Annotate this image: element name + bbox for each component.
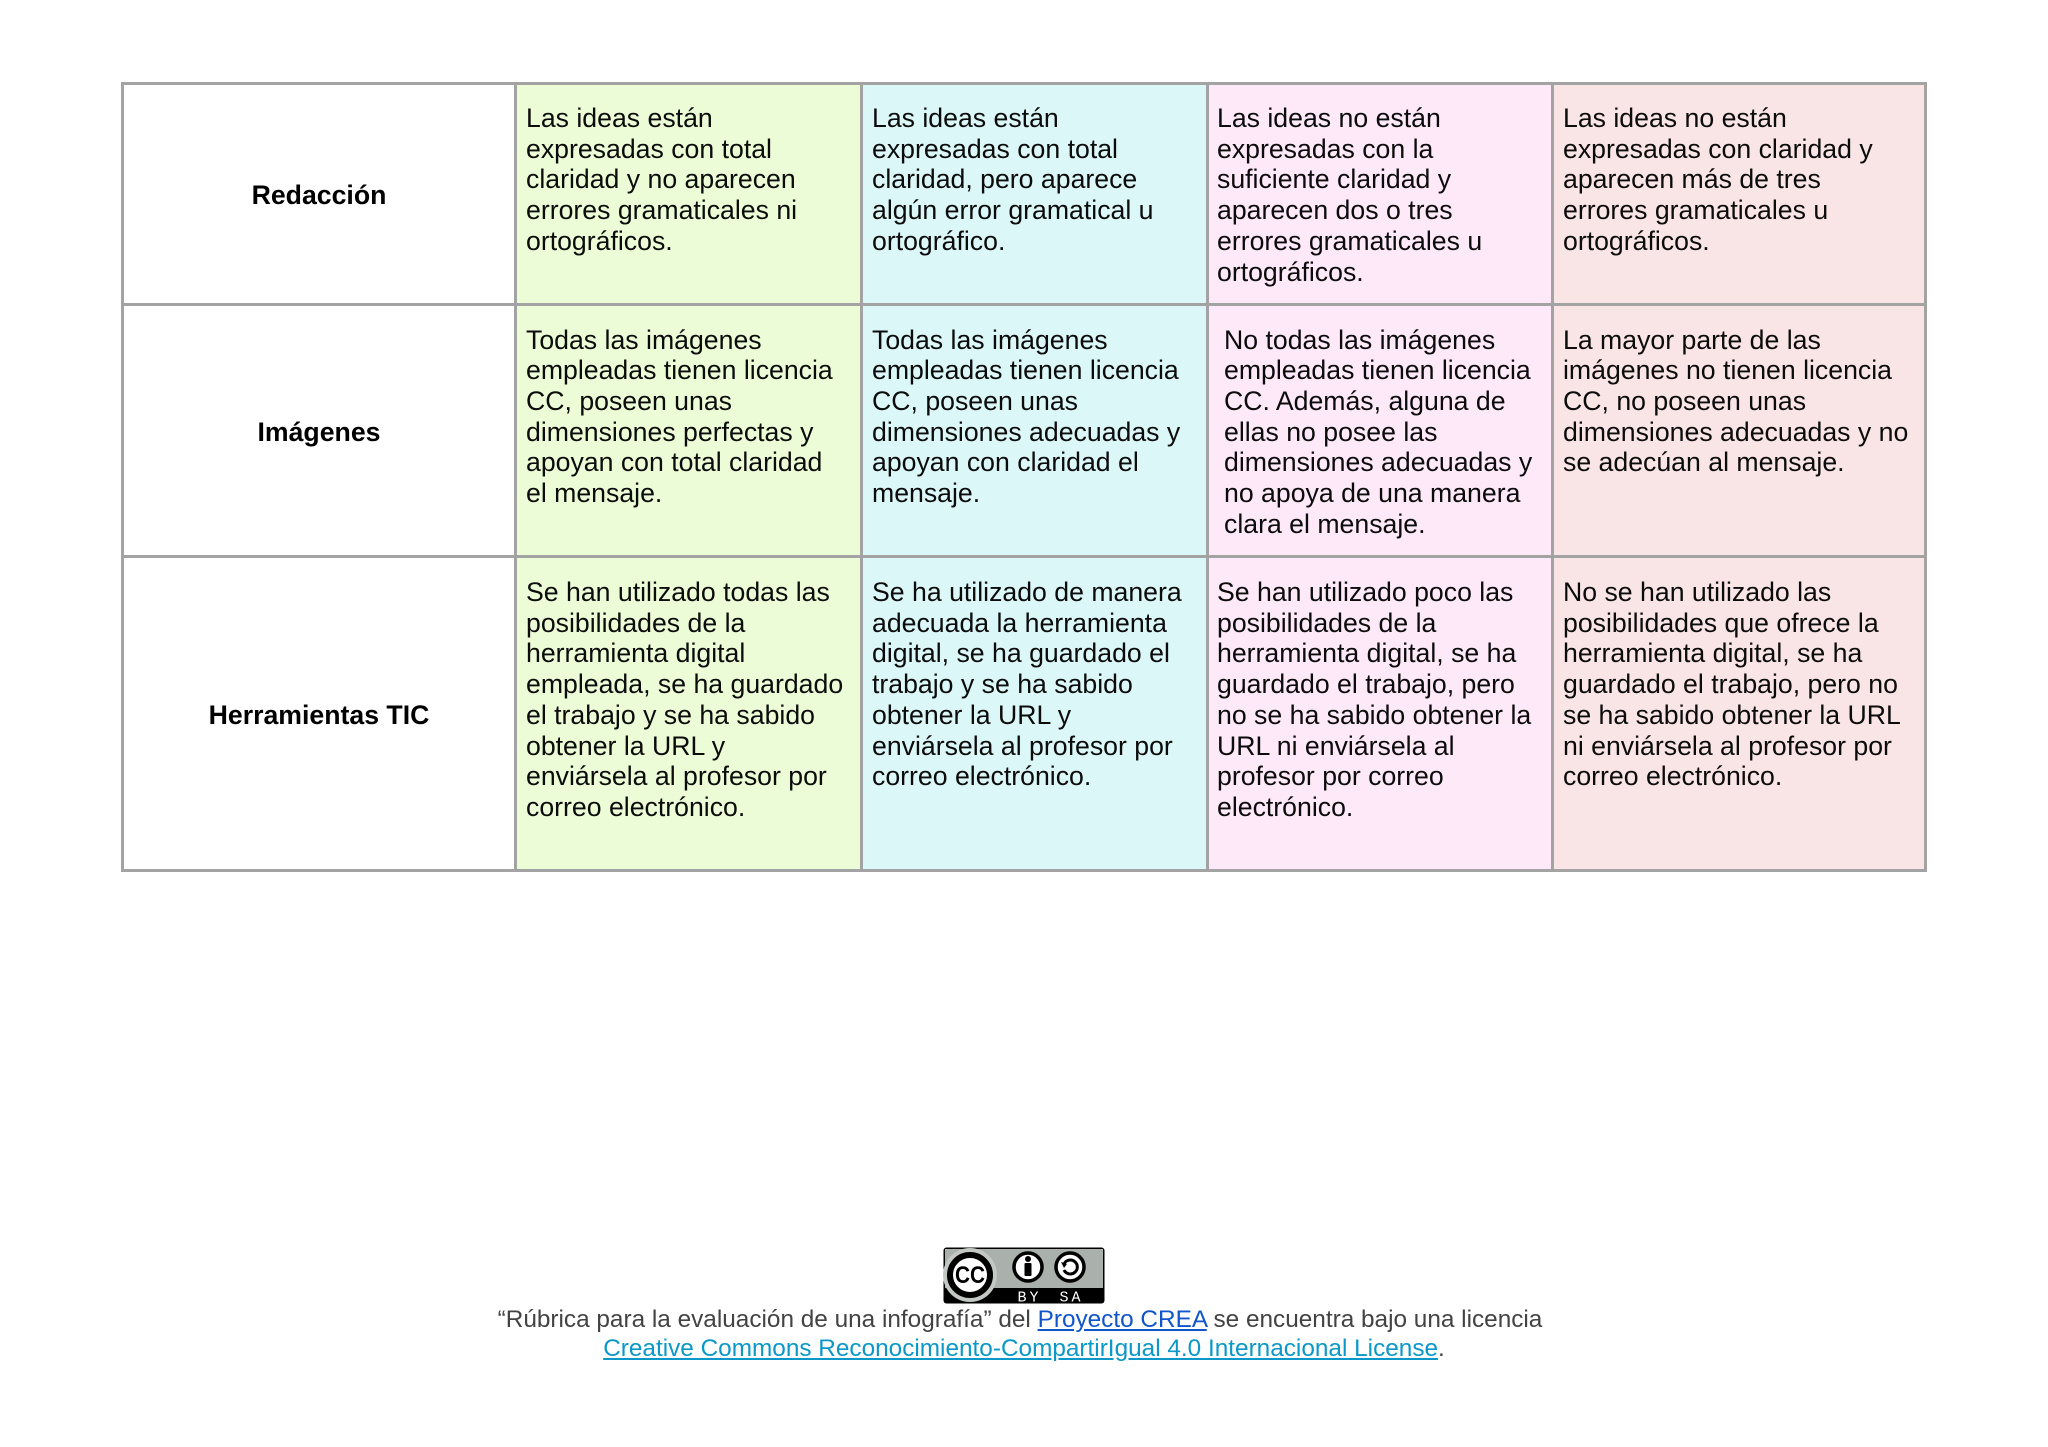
text: Herramientas TIC level 3: herramienta digital, se ha (1217, 638, 1516, 668)
text: Herramientas TIC level 2: obtener la URL y (872, 700, 1071, 730)
text: Redacción level 2 (872, 103, 1154, 256)
text: Imágenes level 1: Todas las imágenes (526, 324, 762, 354)
text: Imágenes level 1: CC, poseen unas (526, 386, 732, 416)
row 3 level 1 cell (514, 555, 863, 872)
text: Imágenes level 2 (872, 324, 1180, 508)
text: Herramientas TIC level 4: posibilidades que ofrece la (1563, 608, 1879, 638)
text: Imágenes level 4: imágenes no tienen licencia (1563, 355, 1892, 385)
text: Herramientas TIC level 2: adecuada la herramienta (872, 608, 1167, 638)
text: Redacción level 1: ortográficos. (526, 226, 673, 256)
text: Herramientas TIC level 1 (526, 577, 843, 822)
text: Herramientas TIC level 4: ni enviársela al profesor por (1563, 731, 1892, 761)
text: Herramientas TIC level 2 (872, 577, 1182, 791)
text: Imágenes level 2: apoyan con claridad el (872, 447, 1139, 477)
text: Imágenes level 3: empleadas tienen licencia (1224, 355, 1531, 385)
row 3 header cell: Herramientas TIC (121, 555, 517, 872)
text: Herramientas TIC level 3: electrónico. (1217, 792, 1353, 822)
text: Imágenes level 1: el mensaje. (526, 478, 662, 508)
text: Herramientas TIC level 3: Se han utilizado poco las (1217, 577, 1513, 607)
text: Herramientas TIC level 3: no se ha sabido obtener la (1217, 700, 1531, 730)
text: Herramientas TIC level 2: Se ha utilizado de manera (872, 577, 1182, 607)
text: Redacción level 2: algún error gramatical u (872, 195, 1154, 225)
footer: license line 2: Creative Commons Reconocimiento-CompartirIgual 4.0 Internacional License. (603, 1334, 1445, 1362)
text: Herramientas TIC level 3: profesor por correo (1217, 761, 1444, 791)
footer: license line 1: “Rúbrica para la evaluación de una infografía” del Proyecto CREA se encuentra bajo una licencia (498, 1306, 1542, 1333)
text: Redacción level 4: ortográficos. (1563, 226, 1710, 256)
text: Imágenes level 2: CC, poseen unas (872, 386, 1078, 416)
row 1 header cell: Redacción (121, 82, 517, 306)
row 2 level 2 cell (860, 303, 1209, 558)
row 1 level 3 cell (1206, 82, 1554, 306)
text: Imágenes level 4: se adecúan al mensaje. (1563, 447, 1845, 477)
row 2 header cell: Imágenes (121, 303, 517, 558)
text: Imágenes level 3: ellas no posee las (1224, 417, 1437, 447)
text: Herramientas TIC level 4: correo electrónico. (1563, 761, 1782, 791)
text: Herramientas TIC level 2: digital, se ha guardado el (872, 638, 1170, 668)
rubric table (121, 82, 1927, 872)
text: Redacción level 3: aparecen dos o tres (1217, 195, 1453, 225)
text: Redacción level 2: ortográfico. (872, 226, 1005, 256)
text: Imágenes level 2: empleadas tienen licencia (872, 355, 1179, 385)
row 2 level 4 cell (1551, 303, 1927, 558)
text: Imágenes level 1: dimensiones perfectas y (526, 417, 813, 447)
text: Redacción level 1: errores gramaticales ni (526, 195, 797, 225)
text: Herramientas TIC level 2: enviársela al profesor por (872, 731, 1173, 761)
text: Herramientas TIC level 1: enviársela al profesor por (526, 761, 827, 791)
heading: Redacción: Redacción (252, 180, 386, 210)
text: Herramientas TIC level 4: se ha sabido obtener la URL (1563, 700, 1901, 730)
text: Imágenes level 3: CC. Además, alguna de (1224, 386, 1506, 416)
text: Herramientas TIC level 4: No se han utilizado las (1563, 577, 1831, 607)
text: Imágenes level 4 (1563, 324, 1908, 477)
text: Redacción level 1 (526, 103, 797, 256)
text: Herramientas TIC level 1: el trabajo y se ha sabido (526, 700, 815, 730)
text: Imágenes level 1: apoyan con total claridad (526, 447, 822, 477)
text: Redacción level 3: errores gramaticales u (1217, 226, 1482, 256)
text: Imágenes level 4: CC, no poseen unas (1563, 386, 1806, 416)
text: Redacción level 4: expresadas con claridad y (1563, 134, 1873, 164)
text: Redacción level 3: expresadas con la (1217, 134, 1433, 164)
text: Redacción level 3: Las ideas no están (1217, 103, 1441, 133)
text: Redacción level 3 (1217, 103, 1482, 287)
text: Imágenes level 1 (526, 324, 833, 508)
text: Imágenes level 2: mensaje. (872, 478, 980, 508)
text: Redacción level 3: suficiente claridad y (1217, 164, 1451, 194)
text: Redacción level 1: expresadas con total (526, 134, 772, 164)
text: Herramientas TIC level 3: posibilidades de la (1217, 608, 1436, 638)
text: Imágenes level 3: clara el mensaje. (1224, 509, 1426, 539)
text: Herramientas TIC level 3 (1217, 577, 1532, 822)
row 2 level 1 cell (514, 303, 863, 558)
row 1 level 4 cell (1551, 82, 1927, 306)
text: Imágenes level 2: Todas las imágenes (872, 324, 1108, 354)
text: Imágenes level 4: dimensiones adecuadas y no (1563, 417, 1908, 447)
icon: Creative Commons BY-SA badge (943, 1248, 1104, 1305)
text: Imágenes level 3 (1224, 324, 1532, 539)
heading: Imágenes: Imágenes (258, 417, 380, 447)
text: Herramientas TIC level 1: posibilidades de la (526, 608, 745, 638)
text: Herramientas TIC level 3: guardado el trabajo, pero (1217, 669, 1515, 699)
text: Imágenes level 2: dimensiones adecuadas y (872, 417, 1180, 447)
text: Herramientas TIC level 4: guardado el trabajo, pero no (1563, 669, 1898, 699)
row 3 level 4 cell (1551, 555, 1927, 872)
text: Imágenes level 3: no apoya de una manera (1224, 478, 1520, 508)
text: Redacción level 3: ortográficos. (1217, 257, 1364, 287)
text: Herramientas TIC level 1: empleada, se ha guardado (526, 669, 843, 699)
text: Redacción level 4 (1563, 103, 1873, 256)
text: Herramientas TIC level 1: obtener la URL y (526, 731, 725, 761)
row 1 level 1 cell (514, 82, 863, 306)
text: Herramientas TIC level 1: Se han utilizado todas las (526, 577, 830, 607)
text: Herramientas TIC level 4 (1563, 577, 1901, 791)
text: Imágenes level 3: dimensiones adecuadas y (1224, 447, 1532, 477)
text: Redacción level 2: claridad, pero aparece (872, 164, 1137, 194)
text: Imágenes level 3: No todas las imágenes (1224, 324, 1495, 354)
text: Redacción level 1: Las ideas están (526, 103, 713, 133)
text: Redacción level 4: errores gramaticales u (1563, 195, 1828, 225)
text: Herramientas TIC level 3: URL ni enviársela al (1217, 731, 1455, 761)
text: Imágenes level 4: La mayor parte de las (1563, 324, 1821, 354)
text: Imágenes level 1: empleadas tienen licencia (526, 355, 833, 385)
icon: Creative Commons BY-SA badge: CC (955, 1262, 985, 1289)
text: Herramientas TIC level 1: herramienta digital (526, 638, 745, 668)
text: Redacción level 1: claridad y no aparecen (526, 164, 796, 194)
text: Redacción level 2: expresadas con total (872, 134, 1118, 164)
text: Herramientas TIC level 2: trabajo y se ha sabido (872, 669, 1133, 699)
text: Redacción level 2: Las ideas están (872, 103, 1059, 133)
text: Herramientas TIC level 2: correo electrónico. (872, 761, 1091, 791)
heading: Herramientas TIC: Herramientas TIC (209, 700, 429, 730)
row 3 level 2 cell (860, 555, 1209, 872)
row 1 level 2 cell (860, 82, 1209, 306)
row 2 level 3 cell (1206, 303, 1554, 558)
text: Redacción level 4: Las ideas no están (1563, 103, 1787, 133)
row 3 level 3 cell (1206, 555, 1554, 872)
text: Herramientas TIC level 1: correo electrónico. (526, 792, 745, 822)
text: Herramientas TIC level 4: herramienta digital, se ha (1563, 638, 1862, 668)
text: Redacción level 4: aparecen más de tres (1563, 164, 1821, 194)
